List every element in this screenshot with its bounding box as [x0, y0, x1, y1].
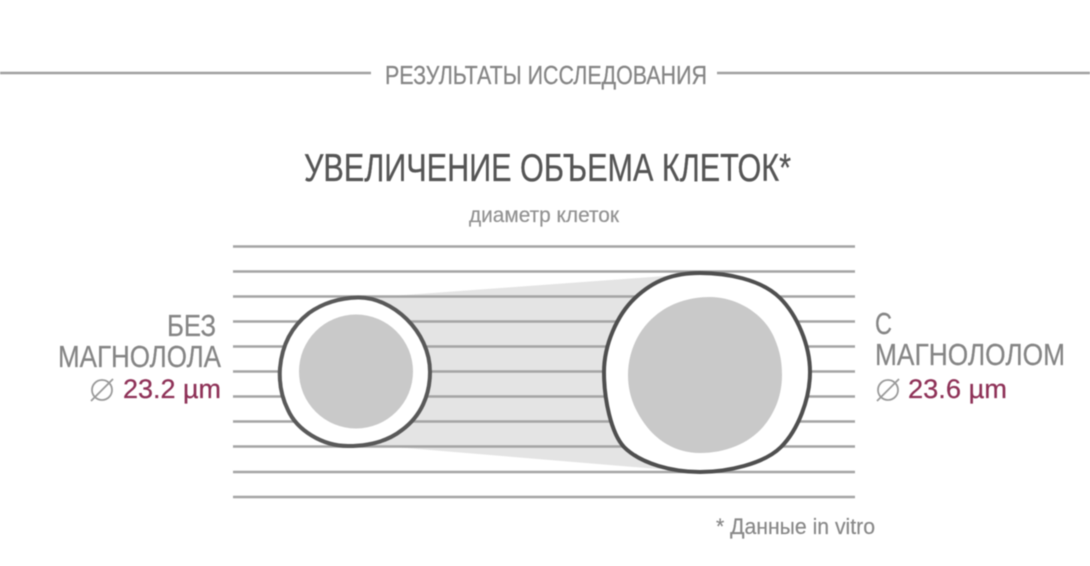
- cell membrane large: [604, 273, 810, 472]
- chart subtitle: диаметр клеток: [469, 204, 620, 227]
- cell nucleus large: [628, 297, 782, 453]
- cell without magnolol: [280, 297, 430, 446]
- right label: [875, 306, 1065, 404]
- cell with magnolol: [604, 273, 810, 472]
- right value: 23.6 µm: [908, 374, 1007, 404]
- shaded volume band: [370, 276, 682, 471]
- grid lines: [233, 246, 855, 497]
- diameter symbol right: [877, 379, 899, 401]
- left label: [58, 308, 221, 404]
- diameter symbol left: [91, 379, 113, 401]
- footnote: * Данные in vitro: [716, 514, 875, 539]
- left label: БЕЗ: [167, 308, 216, 343]
- right label: С: [875, 306, 892, 341]
- section heading: РЕЗУЛЬТАТЫ ИССЛЕДОВАНИЯ: [385, 60, 707, 90]
- left value: 23.2 µm: [123, 374, 221, 404]
- cell nucleus small: [299, 314, 413, 428]
- chart title: УВЕЛИЧЕНИЕ ОБЪЕМА КЛЕТОК*: [304, 147, 791, 190]
- left label: МАГНОЛОЛА: [58, 339, 221, 374]
- cell membrane small: [280, 297, 430, 446]
